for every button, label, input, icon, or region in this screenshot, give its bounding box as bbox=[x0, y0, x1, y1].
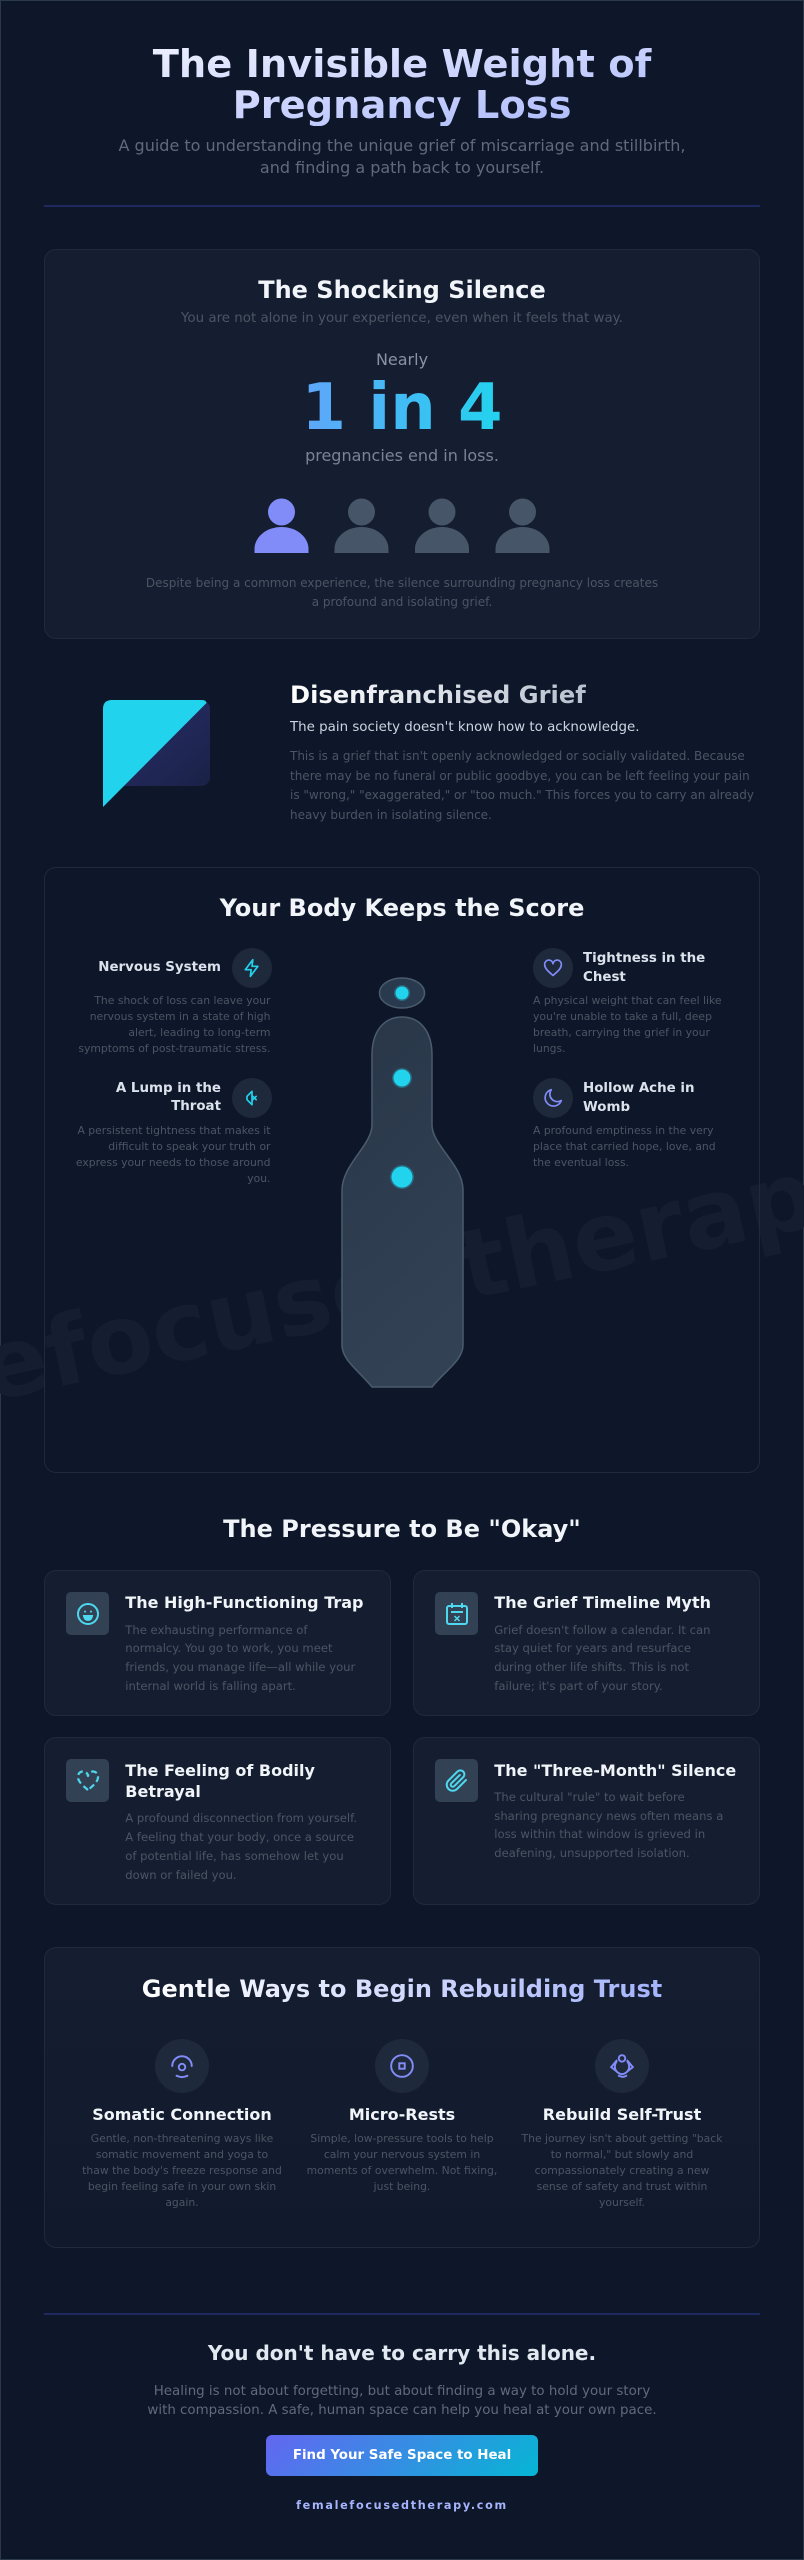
description: The journey isn't about getting "back bbox=[522, 2132, 722, 2144]
description: you're unable to take a full, deep bbox=[533, 1010, 712, 1023]
body text: heavy burden in isolating silence. bbox=[290, 808, 492, 822]
description: The cultural "rule" to wait before bbox=[494, 1790, 685, 1804]
description bbox=[494, 1622, 710, 1693]
description: A feeling that your body, once a source bbox=[125, 1830, 354, 1844]
icon: pause bbox=[375, 2039, 429, 2093]
description: again. bbox=[165, 2196, 199, 2209]
icon: speech bubble bbox=[103, 700, 210, 807]
icon: calendar bbox=[435, 1592, 478, 1635]
heading bbox=[45, 1974, 759, 2004]
header bbox=[118, 42, 685, 177]
heading: the pressure to be okay: The Pressure to Be "Okay" bbox=[223, 1515, 581, 1543]
description: difficult to speak your truth or bbox=[108, 1140, 270, 1153]
description bbox=[307, 2132, 497, 2193]
description: down or failed you. bbox=[125, 1868, 237, 1882]
subtitle bbox=[118, 136, 685, 177]
description: you. bbox=[247, 1172, 270, 1185]
title: Tightness in the bbox=[583, 951, 705, 966]
description bbox=[76, 1124, 270, 1185]
body text: is "wrong," "exaggerated," or "too much." This forces you to carry an already bbox=[290, 788, 754, 802]
description: express your needs to those around bbox=[76, 1156, 270, 1169]
description: stay quiet for years and resurface bbox=[494, 1641, 691, 1655]
symptom: tightness in the chest bbox=[533, 948, 722, 1055]
icon: smile bbox=[66, 1592, 109, 1635]
symptom: nervous system bbox=[78, 948, 272, 1055]
closing text: with compassion. A safe, human space can help you heal at your own pace. bbox=[147, 2403, 657, 2418]
title: Nervous System bbox=[98, 960, 221, 975]
card: bodily betrayal bbox=[44, 1737, 391, 1905]
description bbox=[82, 2132, 282, 2209]
column: micro-rests bbox=[307, 2039, 497, 2193]
heading: The Shocking Silence bbox=[258, 276, 546, 304]
title: The Feeling of Bodily bbox=[125, 1761, 315, 1780]
title: Betrayal bbox=[125, 1782, 201, 1801]
description: thaw the body's freeze response and bbox=[82, 2164, 282, 2177]
description: alert, leading to long-term bbox=[128, 1026, 270, 1039]
intro text: You are not alone in your experience, even when it feels that way. bbox=[181, 311, 623, 326]
description: sense of safety and trust within bbox=[537, 2180, 707, 2193]
title: The High-Functioning Trap bbox=[125, 1593, 364, 1612]
description: begin feeling safe in your own skin bbox=[88, 2180, 276, 2193]
description: loss within that window is grieved in bbox=[494, 1827, 705, 1841]
closing heading: You don't have to carry this alone. bbox=[208, 2341, 596, 2365]
symptom: hollow ache in womb bbox=[533, 1078, 716, 1169]
statistic: 1 in 4 bbox=[301, 371, 503, 445]
closing text: Despite being a common experience, the silence surrounding pregnancy loss creates bbox=[146, 576, 658, 590]
description: the eventual loss. bbox=[533, 1156, 629, 1169]
subheading: The pain society doesn't know how to acknowledge. bbox=[290, 720, 639, 735]
body text bbox=[290, 749, 754, 822]
footer bbox=[147, 2341, 657, 2512]
head bbox=[380, 978, 424, 1008]
title: Rebuild Self-Trust bbox=[543, 2104, 701, 2124]
description: Grief doesn't follow a calendar. It can bbox=[494, 1622, 710, 1636]
description: nervous system in a state of high bbox=[90, 1010, 270, 1023]
pain points bbox=[390, 985, 414, 1189]
description: moments of overwhelm. Not fixing, bbox=[307, 2164, 497, 2177]
description: friends, you manage life—all while your bbox=[125, 1660, 355, 1674]
description: deafening, unsupported isolation. bbox=[494, 1846, 690, 1860]
description: of potential life, has somehow let you bbox=[125, 1849, 344, 1863]
subtitle: A guide to understanding the unique grief of miscarriage and stillbirth, bbox=[119, 136, 685, 155]
card: grief timeline myth bbox=[413, 1570, 760, 1716]
title: Throat bbox=[171, 1099, 221, 1114]
title: Micro-Rests bbox=[349, 2104, 455, 2124]
title bbox=[583, 951, 705, 985]
description bbox=[533, 994, 722, 1055]
description: to normal," but slowly and bbox=[551, 2148, 693, 2161]
closing text bbox=[146, 576, 658, 609]
card: three-month silence bbox=[413, 1737, 760, 1905]
statistic caption: pregnancies end in loss. bbox=[305, 446, 499, 465]
column: rebuild self-trust bbox=[522, 2039, 722, 2209]
description: A profound emptiness in the very bbox=[533, 1124, 714, 1137]
description: sharing pregnancy news often means a bbox=[494, 1808, 723, 1822]
description: A persistent tightness that makes it bbox=[77, 1124, 270, 1137]
description bbox=[125, 1622, 356, 1693]
title: The Grief Timeline Myth bbox=[494, 1593, 711, 1612]
panel: the shocking silence bbox=[44, 249, 760, 639]
icon: moon bbox=[533, 1078, 573, 1118]
description bbox=[522, 2132, 722, 2209]
description: calm your nervous system in bbox=[324, 2148, 480, 2161]
description: somatic movement and yoga to bbox=[96, 2148, 268, 2161]
title bbox=[44, 44, 760, 126]
description: The shock of loss can leave your bbox=[94, 994, 270, 1007]
description: internal world is falling apart. bbox=[125, 1679, 296, 1693]
title: Somatic Connection bbox=[92, 2104, 272, 2124]
icon: heart bbox=[533, 948, 573, 988]
heading: Disenfranchised Grief bbox=[290, 681, 586, 709]
heading: Your Body Keeps the Score bbox=[220, 894, 584, 922]
closing text: a profound and isolating grief. bbox=[312, 595, 492, 609]
closing text bbox=[147, 2384, 657, 2418]
button: Find Your Safe Space to Heal bbox=[293, 2448, 511, 2463]
title: Womb bbox=[583, 1100, 630, 1115]
card: high-functioning trap bbox=[44, 1570, 391, 1716]
nearly label: Nearly bbox=[376, 350, 428, 369]
description bbox=[494, 1790, 723, 1860]
description: Gentle, non-threatening ways like bbox=[91, 2132, 273, 2144]
description: yourself. bbox=[599, 2196, 645, 2209]
description: compassionately creating a new bbox=[535, 2164, 709, 2177]
title: Pregnancy Loss bbox=[233, 83, 571, 128]
description: failure; it's part of your story. bbox=[494, 1679, 663, 1693]
panel: disenfranchised grief bbox=[103, 681, 754, 822]
body text: This is a grief that isn't openly acknowledged or socially validated. Because bbox=[290, 749, 745, 763]
icon row: people bbox=[254, 498, 550, 553]
body text: there may be no funeral or public goodbye, you can be left feeling your pain bbox=[290, 769, 750, 783]
icon: figure bbox=[595, 2039, 649, 2093]
description bbox=[78, 994, 270, 1055]
description: Simple, low-pressure tools to help bbox=[310, 2132, 494, 2144]
description: A profound disconnection from yourself. bbox=[125, 1811, 357, 1825]
column: somatic connection bbox=[82, 2039, 282, 2209]
title: The Invisible Weight of bbox=[153, 42, 651, 87]
title: A Lump in the bbox=[116, 1080, 221, 1096]
icon: bolt bbox=[232, 948, 272, 988]
description: during other life shifts. This is not bbox=[494, 1660, 689, 1674]
panel: gentle ways bbox=[44, 1947, 760, 2248]
heading: Gentle Ways to Begin Rebuilding Trust bbox=[142, 1975, 662, 2003]
description bbox=[125, 1811, 357, 1882]
title: Hollow Ache in bbox=[583, 1081, 695, 1096]
title bbox=[583, 1081, 695, 1115]
title: Chest bbox=[583, 970, 626, 985]
title bbox=[125, 1761, 315, 1801]
torso bbox=[342, 1017, 463, 1387]
title: The "Three-Month" Silence bbox=[494, 1761, 736, 1780]
button bbox=[266, 2435, 538, 2476]
icon: broken heart bbox=[66, 1759, 109, 1802]
subtitle: and finding a path back to yourself. bbox=[260, 158, 544, 177]
website link: femalefocusedtherapy.com bbox=[296, 2499, 508, 2512]
body figure bbox=[341, 977, 464, 1388]
title bbox=[116, 1080, 221, 1114]
symptom: lump in the throat bbox=[76, 1078, 272, 1185]
description: place that carried hope, love, and bbox=[533, 1140, 716, 1153]
description bbox=[533, 1124, 716, 1169]
description: The exhausting performance of bbox=[125, 1622, 307, 1636]
icon: somatic bbox=[155, 2039, 209, 2093]
description: lungs. bbox=[533, 1042, 566, 1055]
description: symptoms of post-traumatic stress. bbox=[78, 1042, 270, 1055]
closing text: Healing is not about forgetting, but about finding a way to hold your story bbox=[154, 2384, 650, 2399]
icon: muted speaker bbox=[232, 1078, 272, 1118]
panel: your body keeps the score bbox=[44, 867, 760, 1473]
icon: paperclip bbox=[435, 1759, 478, 1802]
description: A physical weight that can feel like bbox=[533, 994, 722, 1007]
description: breath, carrying the grief in your bbox=[533, 1026, 710, 1039]
description: just being. bbox=[374, 2180, 430, 2193]
description: normalcy. You go to work, you meet bbox=[125, 1641, 333, 1655]
